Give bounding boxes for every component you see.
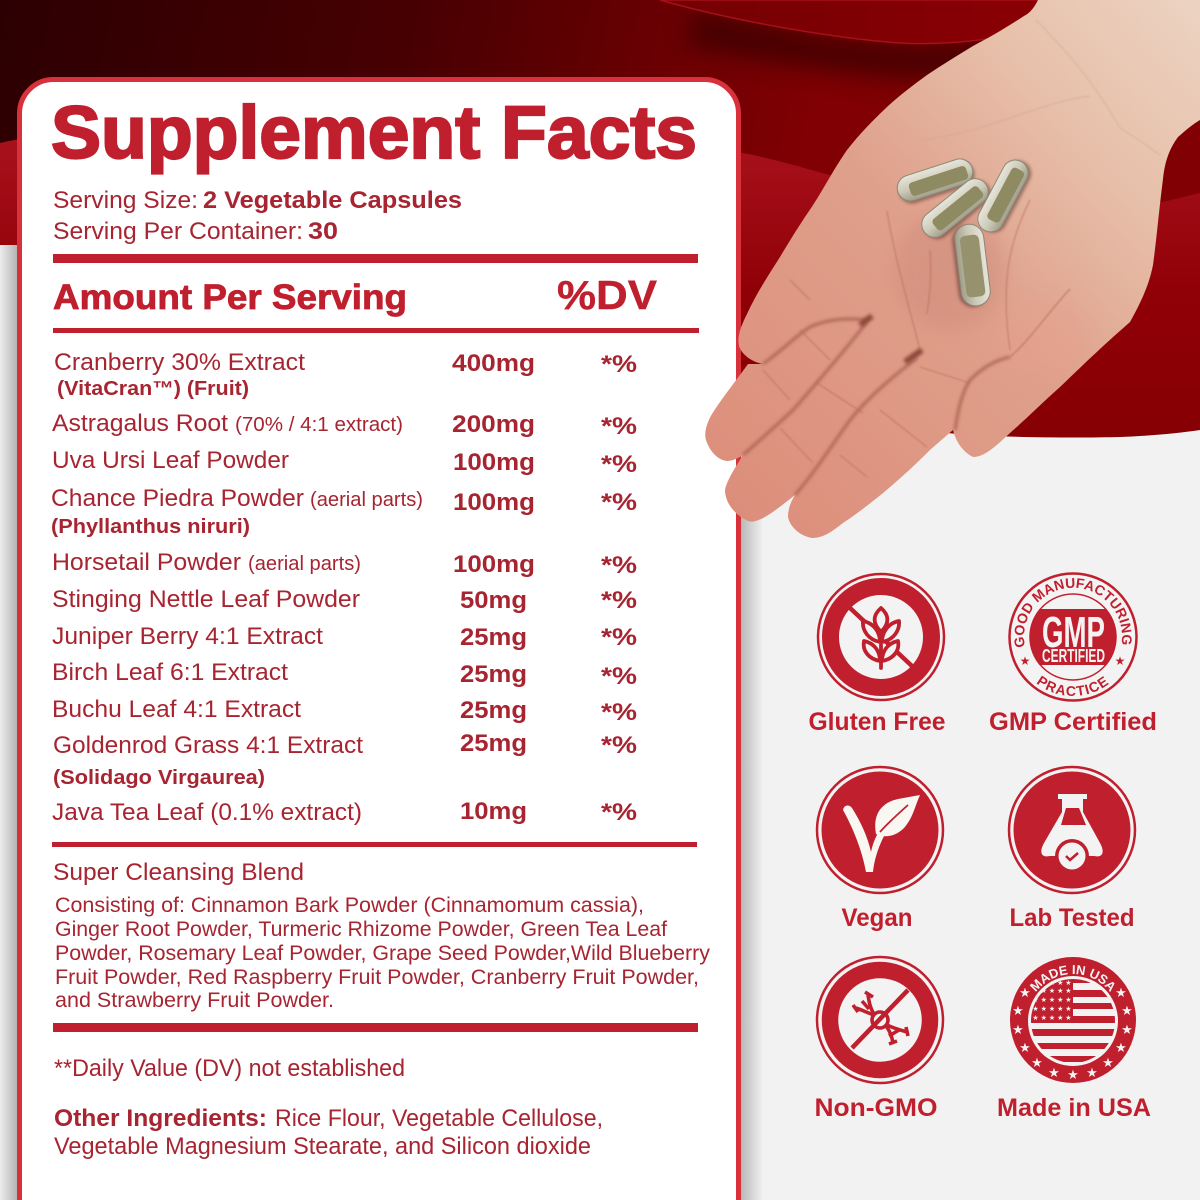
icon: made in USA seal: ★ xyxy=(1019,1040,1031,1055)
icon: GMP certified seal: ★ xyxy=(1020,654,1030,668)
icon: made in USA seal: ★ xyxy=(1067,1067,1079,1082)
serving information xyxy=(53,187,462,245)
other ingredients: Other Ingredients: xyxy=(54,1105,267,1132)
ingredient table: 25mg xyxy=(460,730,527,757)
wheat glyph xyxy=(863,608,899,668)
ingredient table: 200mg xyxy=(452,411,535,438)
background: light lower area xyxy=(741,428,1200,1200)
ingredient table: Buchu Leaf 4:1 Extract xyxy=(52,696,301,723)
ingredient table: Goldenrod Grass 4:1 Extract xyxy=(53,732,363,759)
ingredient table: Stinging Nettle Leaf Powder xyxy=(52,586,360,613)
icon: non-GMO xyxy=(817,957,943,1083)
ingredient table: *% xyxy=(601,489,637,516)
ingredient table: 400mg xyxy=(452,350,535,377)
palm and knuckle lines xyxy=(763,200,1030,477)
ingredient table: Horsetail Powder xyxy=(52,549,241,576)
flag: ★ ★ ★ ★ ★ xyxy=(1032,1014,1072,1022)
icon: made in USA seal: ★ xyxy=(1012,1022,1024,1037)
ingredient table: 25mg xyxy=(460,697,527,724)
capsules xyxy=(894,155,1036,309)
blend ingredients xyxy=(55,893,710,1012)
icon: GMP certified seal: GOOD MANUFACTURING xyxy=(1014,578,1132,648)
ingredient table: Astragalus Root xyxy=(52,410,228,437)
icon: made in USA seal: ★ xyxy=(1115,1040,1127,1055)
serving information: 2 Vegetable Capsules xyxy=(203,187,462,214)
icon: made in USA seal: ★ xyxy=(1115,985,1127,1000)
column heading: percent daily value: %DV xyxy=(557,272,658,318)
serving information: 30 xyxy=(308,218,338,245)
ingredient table: *% xyxy=(601,699,637,726)
other ingredients: Vegetable Magnesium Stearate, and Silicon dioxide xyxy=(54,1133,591,1160)
icon: made in USA seal: ★ xyxy=(1012,1003,1024,1018)
daily value note: **Daily Value (DV) not established xyxy=(54,1055,405,1082)
icon: GMP certified seal xyxy=(1008,572,1138,702)
icon: made in USA seal: ★ xyxy=(1031,1055,1043,1070)
ingredient table: *% xyxy=(601,624,637,651)
blend ingredients: and Strawberry Fruit Powder. xyxy=(55,988,334,1012)
icon: made in USA seal: ★ xyxy=(1019,985,1031,1000)
icon: GMP certified seal: CERTIFIED xyxy=(1042,646,1105,666)
ingredient table: *% xyxy=(601,732,637,759)
ingredient table: 10mg xyxy=(460,798,527,825)
label: lab tested: Lab Tested xyxy=(1010,904,1134,932)
ingredient table: (aerial parts) xyxy=(248,553,361,575)
label: gluten free: Gluten Free xyxy=(808,708,946,736)
title: Supplement Facts xyxy=(51,91,697,174)
blend name: Super Cleansing Blend xyxy=(53,859,304,886)
icon: made in USA seal: ★ xyxy=(1102,1055,1114,1070)
icon: made in USA seal: ★ xyxy=(1121,1022,1133,1037)
card shadow right xyxy=(741,440,763,1200)
icon: GMP certified seal: ★ xyxy=(1115,654,1125,668)
ingredient table: 25mg xyxy=(460,661,527,688)
flag: ★ ★ ★ ★ ★ xyxy=(1032,1005,1072,1013)
ingredient table: Chance Piedra Powder xyxy=(51,485,304,512)
label: made in USA: Made in USA xyxy=(997,1094,1151,1122)
ingredient table: *% xyxy=(601,351,637,378)
blend ingredients: Fruit Powder, Red Raspberry Fruit Powder, Cranberry Fruit Powder, xyxy=(55,965,699,989)
icon: made in USA seal: ★ xyxy=(1048,1065,1060,1080)
serving information: Serving Size: xyxy=(53,187,198,214)
label: non-GMO: Non-GMO xyxy=(814,1094,938,1122)
photo: open hand holding capsules xyxy=(705,0,1200,538)
ingredient table: (Phyllanthus niruri) xyxy=(51,516,250,538)
finger separations xyxy=(743,319,1010,495)
flag: ★ ★ ★ ★ ★ xyxy=(1032,987,1072,995)
column heading: amount per serving: Amount Per Serving xyxy=(53,278,407,317)
label: vegan: Vegan xyxy=(842,904,912,932)
flag xyxy=(1030,978,1116,1064)
ingredient table: *% xyxy=(601,413,637,440)
background: large red wave xyxy=(0,132,1200,438)
icon: made in USA seal xyxy=(1010,957,1136,1083)
ingredient table: 100mg xyxy=(453,551,535,578)
blend ingredients: Powder, Rosemary Leaf Powder, Grape Seed Powder,Wild Blueberry xyxy=(55,941,710,965)
icon: made in USA seal: ★ xyxy=(1086,1065,1098,1080)
ingredient table: 25mg xyxy=(460,624,527,651)
background: lower left strip xyxy=(0,245,17,1200)
other ingredients: Rice Flour, Vegetable Cellulose, xyxy=(275,1105,603,1132)
ingredient table: *% xyxy=(601,663,637,690)
background: upper right red wave xyxy=(660,0,1200,44)
icon: lab tested xyxy=(1009,767,1135,893)
ingredient table: 100mg xyxy=(453,449,535,476)
ingredient table: 50mg xyxy=(460,587,527,614)
icon: GMP certified seal: PRACTICE xyxy=(1036,676,1109,696)
icon: gluten free xyxy=(818,574,944,700)
ingredient table: (aerial parts) xyxy=(310,489,423,511)
background: shadow below upper wave xyxy=(690,28,1060,60)
background: dark red header xyxy=(0,0,1200,440)
ingredient table: *% xyxy=(601,552,637,579)
label: GMP certified: GMP Certified xyxy=(989,708,1157,736)
ingredient table: Uva Ursi Leaf Powder xyxy=(52,447,289,474)
ingredient table: (70% / 4:1 extract) xyxy=(235,414,403,436)
panel: supplement facts card xyxy=(20,80,738,1200)
icon: made in USA seal: ★ xyxy=(1121,1003,1133,1018)
icon: GMP certified seal: GMP xyxy=(1042,608,1105,657)
ingredient table: Cranberry 30% Extract xyxy=(54,349,305,376)
ingredient table: (Solidago Virgaurea) xyxy=(53,767,265,789)
icon: vegan xyxy=(817,767,943,893)
blend ingredients: Ginger Root Powder, Turmeric Rhizome Powder, Green Tea Leaf xyxy=(55,917,667,941)
ingredient table: Java Tea Leaf (0.1% extract) xyxy=(52,799,362,826)
ingredient table: Birch Leaf 6:1 Extract xyxy=(52,659,288,686)
flag: ★ ★ ★ ★ ★ xyxy=(1032,979,1072,987)
ingredient table xyxy=(51,349,637,826)
icon: made in USA seal: MADE IN USA xyxy=(1030,965,1114,992)
flag: ★ ★ ★ ★ ★ xyxy=(1032,996,1072,1004)
blend ingredients: Consisting of: Cinnamon Bark Powder (Cinnamomum cassia), xyxy=(55,893,644,917)
other ingredients xyxy=(54,1105,603,1160)
ingredient table: (VitaCran™) (Fruit) xyxy=(57,378,249,400)
ingredient table: *% xyxy=(601,799,637,826)
ingredient table: *% xyxy=(601,587,637,614)
serving information: Serving Per Container: xyxy=(53,218,303,245)
DNA glyph xyxy=(853,992,908,1044)
ingredient table: 100mg xyxy=(453,489,535,516)
ingredient table: *% xyxy=(601,451,637,478)
ingredient table: Juniper Berry 4:1 Extract xyxy=(52,623,323,650)
